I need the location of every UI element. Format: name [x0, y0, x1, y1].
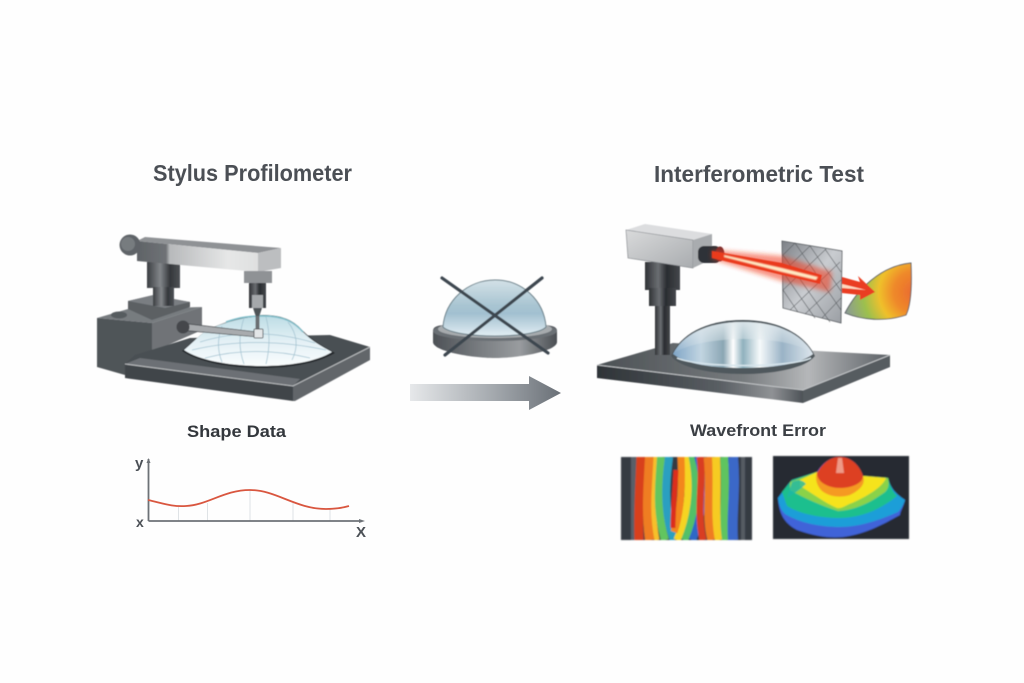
title: stylus profilometer: Stylus Profilometer — [153, 160, 352, 186]
label: shape data: Shape Data — [187, 422, 287, 441]
machine plate — [125, 335, 370, 401]
stylus probe — [176, 271, 272, 338]
gridlines — [178, 490, 330, 521]
laser beam — [712, 250, 875, 300]
dome base — [433, 320, 557, 358]
glass dome sample on stage — [182, 315, 335, 368]
curved result surface — [845, 263, 911, 319]
vertical post — [645, 262, 680, 355]
glass dome — [443, 280, 546, 336]
cross mark — [442, 278, 548, 355]
camera — [626, 224, 724, 268]
panel: interference fringes — [621, 457, 752, 540]
optical grid screen — [782, 241, 842, 323]
illustration: stylus profilometer machine — [97, 234, 370, 401]
horizontal arm and knob — [120, 234, 281, 272]
chart: shape data profile — [135, 455, 366, 541]
machine base block — [97, 295, 202, 375]
icon: crossed-out dome — [433, 278, 557, 358]
instrument plate — [597, 343, 890, 403]
axis label y: y — [135, 455, 144, 472]
arrow: process direction — [410, 376, 561, 410]
illustration: interferometric test setup — [597, 224, 911, 403]
axes — [148, 459, 362, 521]
axis label upper X: X — [356, 524, 366, 541]
glass lens on plate — [671, 320, 815, 374]
label: wavefront error: Wavefront Error — [690, 421, 826, 440]
panel: 3D wavefront surface — [773, 456, 909, 539]
infographic canvas — [96, 164, 913, 542]
profile curve — [148, 490, 349, 509]
axis label lower x: x — [136, 514, 144, 530]
machine column — [147, 262, 180, 306]
surface plot layers — [778, 457, 905, 537]
title: interferometric test: Interferometric Test — [654, 161, 864, 187]
